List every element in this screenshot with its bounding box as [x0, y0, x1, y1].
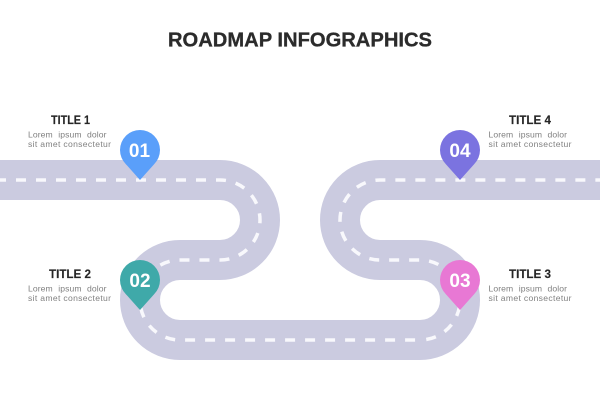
text block: title 1: TITLE 1 [51, 113, 90, 127]
milestone 4 pin: 04 [449, 141, 471, 162]
text block: title 1 [28, 113, 111, 149]
road centre dashes [0, 180, 600, 340]
text block: title 4: Lorem ipsum dolor [488, 130, 567, 140]
text block: title 4: TITLE 4 [509, 113, 551, 127]
milestone 1 pin [120, 130, 160, 180]
milestone 2 pin: 02 [129, 271, 151, 292]
text block: title 4: sit amet consectetur [488, 139, 572, 149]
text block: title 1: sit amet consectetur [28, 139, 111, 149]
milestone 3 pin [440, 260, 480, 310]
text block: title 2: Lorem ipsum dolor [28, 284, 107, 294]
milestone 1 pin: 01 [129, 141, 150, 162]
milestone 2 pin [120, 260, 160, 310]
text block: title 3: TITLE 3 [509, 267, 551, 281]
text block: title 3: Lorem ipsum dolor [488, 284, 567, 294]
text block: title 2: sit amet consectetur [28, 293, 111, 303]
winding road [0, 180, 600, 340]
text block: title 2: TITLE 2 [49, 267, 91, 281]
text block: title 1: Lorem ipsum dolor [28, 130, 107, 140]
text block: title 2 [28, 267, 111, 303]
text block: title 3 [488, 267, 572, 303]
milestone 4 pin [440, 130, 480, 180]
text block: title 4 [488, 113, 572, 149]
text block: title 3: sit amet consectetur [488, 293, 572, 303]
milestone 3 pin: 03 [449, 271, 471, 292]
title: ROADMAP INFOGRAPHICS [168, 30, 432, 52]
